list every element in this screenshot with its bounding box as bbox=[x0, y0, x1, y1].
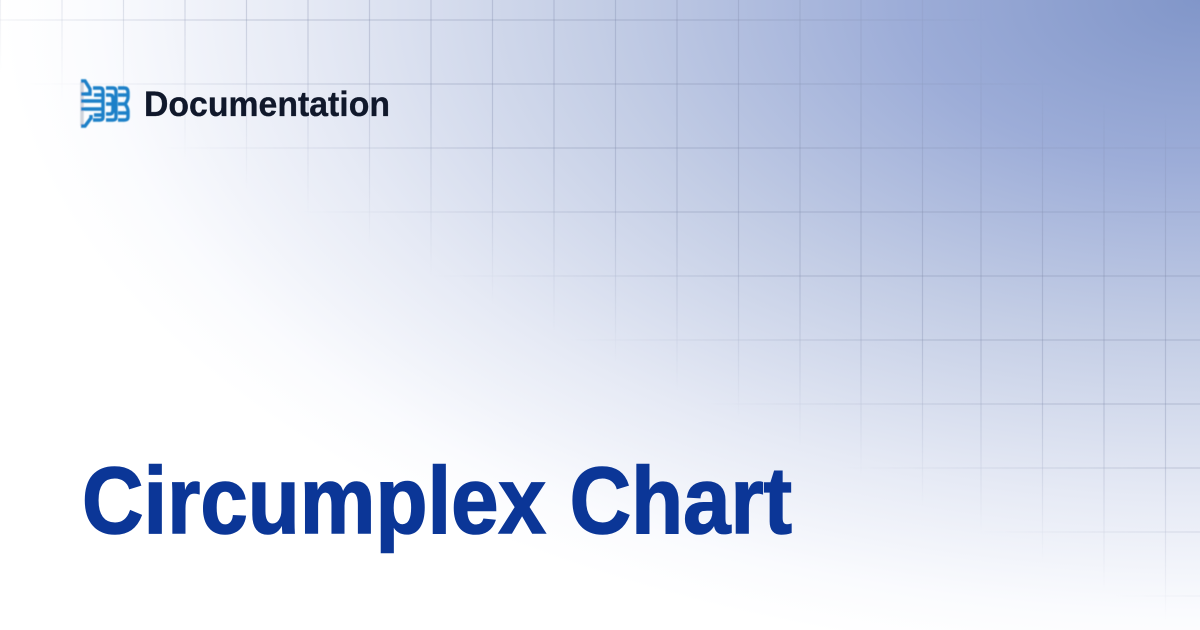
heading: Documentation: Documentation bbox=[144, 85, 390, 124]
title: Circumplex Chart bbox=[82, 448, 792, 554]
icon: logo bbox=[81, 81, 128, 126]
